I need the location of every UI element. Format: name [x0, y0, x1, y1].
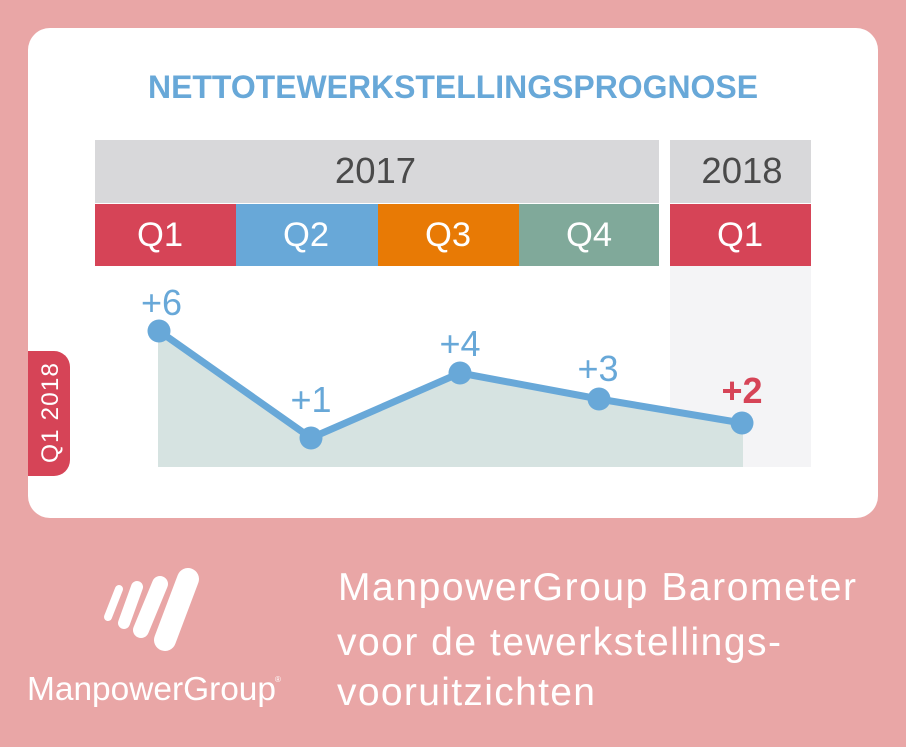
data point: Q3 2017: [439, 323, 481, 384]
line chart: [141, 282, 763, 467]
panel: forecast card: [28, 28, 878, 518]
text block: description: [337, 566, 856, 714]
data point: Q1 2018: +2: [721, 370, 763, 411]
data point: Q1 2018: [721, 370, 763, 434]
area under line: [158, 331, 743, 467]
side tab: Q1 2018: [28, 351, 70, 476]
registered mark: ®: [275, 675, 281, 684]
quarter: Q2 2017: [236, 204, 378, 266]
data point: Q1 2017: [141, 282, 182, 342]
data point: Q2 2017: +1: [290, 379, 332, 420]
quarter: Q3 2017: [378, 204, 519, 266]
data point: Q2 2017: [290, 379, 332, 450]
header: 2017: [95, 140, 659, 203]
quarter: Q1 2018: [670, 204, 811, 266]
highlight column: 2018: [670, 266, 811, 467]
data point: Q4 2017: [577, 348, 619, 410]
header: 2018: [670, 140, 811, 203]
quarter: Q2 2017: Q2: [283, 216, 329, 254]
text block: description: ManpowerGroup Barometer: [338, 566, 856, 609]
trend line: [159, 331, 742, 438]
quarter: Q1 2017: Q1: [137, 216, 183, 254]
logo: ManpowerGroup: [27, 579, 281, 707]
icon: logo stripes: [108, 579, 188, 640]
text block: description: vooruitzichten: [337, 671, 595, 714]
quarter: Q4 2017: [519, 204, 659, 266]
data point: Q3 2017: +4: [439, 323, 481, 364]
quarter: Q3 2017: Q3: [425, 216, 471, 254]
data point: Q4 2017: +3: [577, 348, 619, 389]
header: 2017: 2017: [335, 150, 416, 191]
quarter: Q4 2017: Q4: [566, 216, 612, 254]
data point: Q1 2017: +6: [141, 282, 182, 323]
title: NETTOTEWERKSTELLINGSPROGNOSE: [148, 69, 758, 105]
quarter: Q1 2018: Q1: [717, 216, 763, 254]
quarter: Q1 2017: [95, 204, 236, 266]
logo wordmark: ManpowerGroup: [27, 670, 276, 707]
header: 2018: 2018: [701, 150, 783, 191]
text block: description: voor de tewerkstellings-: [337, 621, 781, 664]
side tab: Q1 2018: Q1 2018: [37, 363, 64, 463]
